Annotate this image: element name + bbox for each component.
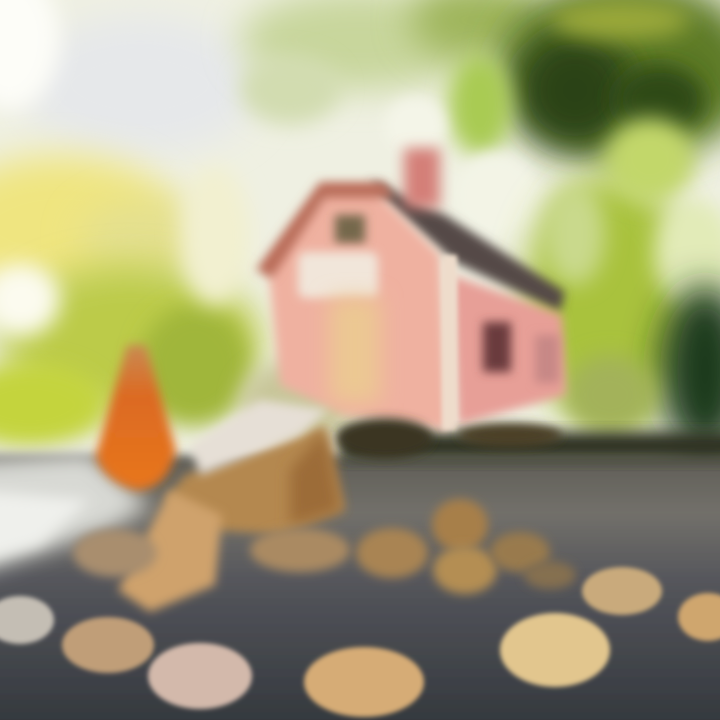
house: gable edge — [256, 182, 395, 278]
background: foliage — [0, 0, 720, 455]
house: roof — [370, 180, 565, 312]
house: side window right — [535, 335, 559, 383]
coin far right — [678, 593, 720, 641]
house: front wall — [268, 190, 448, 430]
coin lower left — [62, 617, 154, 673]
house: cream door — [330, 298, 380, 403]
house: white balcony — [298, 252, 378, 298]
coin right — [582, 567, 662, 615]
coin cluster centre — [250, 528, 350, 572]
orange bottle — [96, 345, 176, 490]
coin left edge — [0, 596, 54, 644]
house: side window — [483, 322, 511, 372]
house: corner trim — [442, 255, 457, 430]
house: side wall — [452, 275, 566, 425]
coin pink — [148, 643, 252, 709]
house — [256, 148, 566, 458]
scattered coins — [0, 499, 720, 717]
ground: dark pavement — [0, 432, 720, 720]
house: attic window — [335, 215, 365, 243]
house: shrubs at base — [337, 418, 433, 458]
tan sack — [118, 400, 345, 612]
coin bottom right — [500, 613, 610, 687]
coin centre bottom — [304, 647, 424, 717]
house: chimney — [404, 148, 440, 208]
coin cluster left — [73, 529, 157, 577]
